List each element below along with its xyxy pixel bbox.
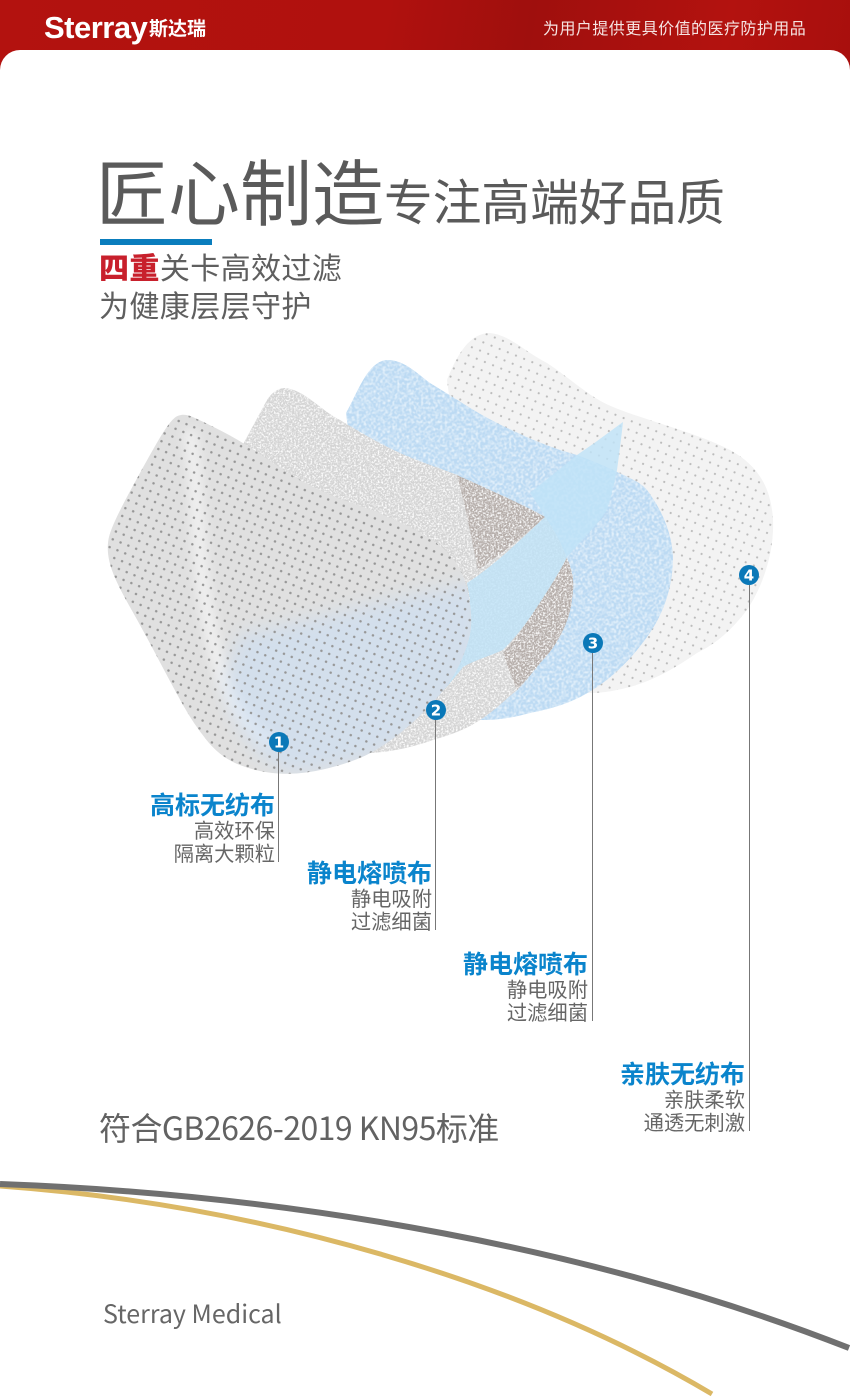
decorative curves [0, 1181, 850, 1396]
title accent bar [100, 239, 212, 245]
subtitle [99, 244, 342, 326]
label 1: 高标无纺布 [150, 786, 275, 822]
layer 4: skin-friendly non-woven [447, 333, 773, 693]
layer 3: blue melt-blown [346, 360, 673, 720]
layer 1: outer non-woven [108, 415, 480, 774]
label 4: 通透无刺激 [644, 1106, 745, 1136]
airflow arrow [437, 422, 623, 697]
marker 1: 1 [274, 733, 284, 751]
title: 匠心制造专注高端好品质 [96, 136, 725, 241]
mask layers diagram [108, 333, 773, 774]
marker 3 [583, 633, 603, 653]
label 4: 亲肤无纺布 [620, 1055, 745, 1091]
logo: Sterray [44, 10, 147, 45]
marker 2: 2 [431, 701, 441, 719]
label 1: 隔离大颗粒 [174, 837, 275, 867]
standard statement: 符合GB2626-2019 KN95标准 [99, 1104, 499, 1150]
logo [44, 10, 206, 45]
label 2: 过滤细菌 [351, 905, 432, 935]
label 3 [463, 945, 588, 1026]
shaded melt-blown area [457, 475, 573, 690]
tagline: 为用户提供更具价值的医疗防护用品 [543, 15, 806, 39]
marker 4 [739, 565, 759, 585]
brand name: Sterray Medical [103, 1295, 282, 1331]
marker 3: 3 [588, 634, 598, 652]
label 1 [150, 786, 275, 867]
subtitle: 为健康层层守护 [99, 282, 312, 326]
marker 1 [269, 732, 289, 752]
label 2: 静电熔喷布 [307, 854, 432, 890]
marker 4: 4 [744, 566, 754, 584]
label 1: 高效环保 [194, 814, 275, 844]
label 2 [307, 854, 432, 935]
label 4: 亲肤柔软 [664, 1083, 745, 1113]
label 2: 静电吸附 [351, 882, 432, 912]
label 4 [620, 1055, 745, 1136]
label 3: 静电熔喷布 [463, 945, 588, 981]
header band [0, 0, 850, 70]
logo: 斯达瑞 [149, 14, 206, 41]
marker 2 [426, 700, 446, 720]
subtitle: 四重关卡高效过滤 [99, 244, 342, 288]
label 3: 过滤细菌 [507, 996, 588, 1026]
layer 2: melt-blown filter [240, 388, 573, 753]
label 3: 静电吸附 [507, 973, 588, 1003]
